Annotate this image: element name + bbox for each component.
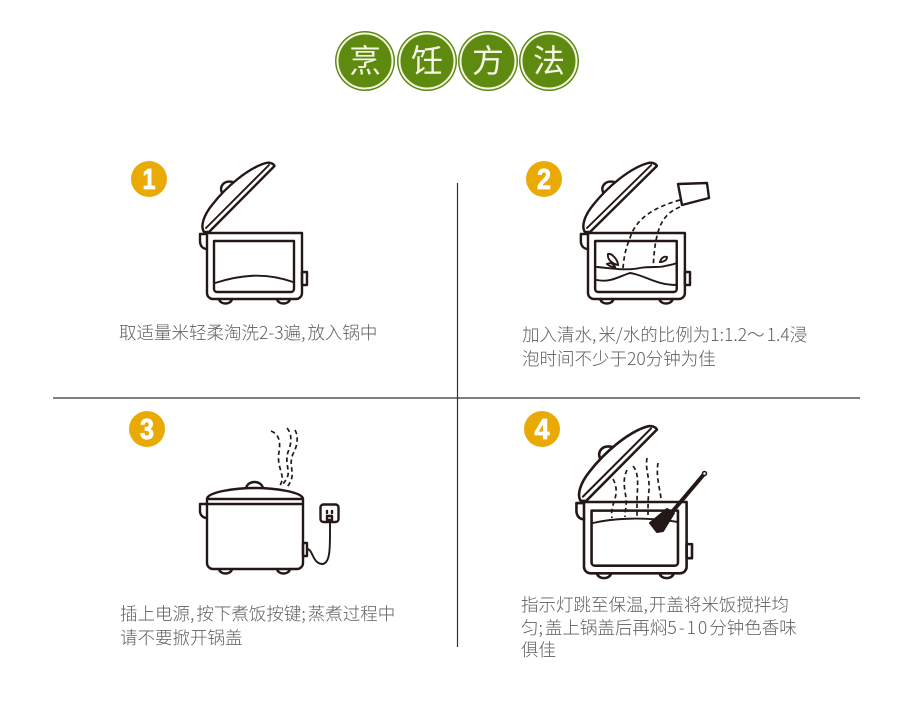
text: step 4 xyxy=(521,592,797,662)
badge: step 3 xyxy=(129,411,165,447)
icon: cooker with steam and paddle xyxy=(576,426,706,578)
text: step 2 xyxy=(522,322,807,371)
badge: step 3: 3 xyxy=(140,414,154,446)
icon: rice cooker with rice xyxy=(200,163,307,304)
title: 饪 xyxy=(411,36,443,82)
title xyxy=(335,31,579,91)
title: 方 xyxy=(472,36,504,82)
text: step 1: 取适量米轻柔淘洗2-3遍,放入锅中 xyxy=(119,320,377,345)
icon: cooker with water pouring xyxy=(581,163,709,304)
icon: closed cooker plugged in xyxy=(200,428,338,574)
text: step 2: 加入清水,米/水的比例为1:1.2～1.4浸 xyxy=(522,322,807,347)
title: 烹 xyxy=(349,36,381,82)
badge: step 2 xyxy=(526,161,562,197)
text: step 4: 俱佳 xyxy=(521,637,556,662)
text: step 3: 请不要掀开锅盖 xyxy=(120,625,242,650)
text: step 4: 匀;盖上锅盖后再焖5-10分钟色香味 xyxy=(521,615,797,640)
text: step 3 xyxy=(120,601,395,650)
badge: step 1 xyxy=(131,161,167,197)
badge: step 1: 1 xyxy=(142,164,156,196)
badge: step 4 xyxy=(524,411,560,447)
text: step 4: 指示灯跳至保温,开盖将米饭搅拌均 xyxy=(521,592,789,617)
text: step 2: 泡时间不少于20分钟为佳 xyxy=(522,346,716,371)
badge: step 2: 2 xyxy=(537,164,551,196)
text: step 3: 插上电源,按下煮饭按键;蒸煮过程中 xyxy=(120,601,395,626)
title: 法 xyxy=(533,36,565,82)
badge: step 4: 4 xyxy=(534,414,550,446)
